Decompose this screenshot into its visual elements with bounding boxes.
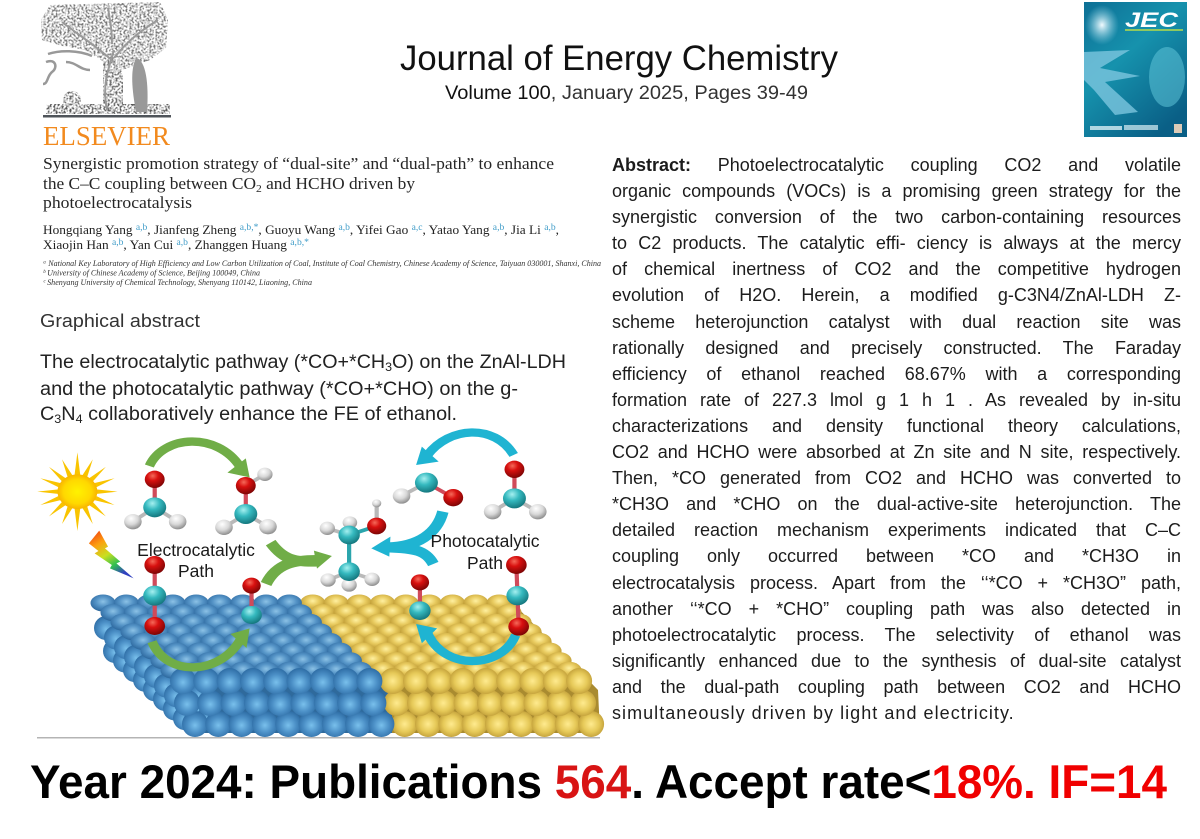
abstract text block: scheme heterojunction catalyst with dual reaction site was bbox=[612, 312, 1181, 332]
label: photocatalytic path: Path bbox=[467, 553, 503, 573]
icon: journal cover: JEC bbox=[1125, 9, 1179, 32]
authors: Xiaojin Han bbox=[43, 238, 104, 252]
paper title: 2 bbox=[256, 183, 262, 195]
authors: a,b,* bbox=[240, 222, 259, 232]
icon: Elsevier tree logo bbox=[41, 2, 171, 118]
paper title bbox=[43, 154, 554, 212]
arrows: green electrocatalytic path bbox=[149, 442, 332, 667]
authors: , Yan Cui bbox=[123, 238, 177, 252]
paper title: the C–C coupling between CO bbox=[43, 174, 246, 193]
abstract text block: evolution of H2O. Herein, a modified g-C3N4/ZnAl-LDH Z- bbox=[612, 285, 1181, 305]
graphical abstract description: N bbox=[61, 404, 76, 425]
logo: Elsevier wordmark: ELSEVIER bbox=[43, 121, 170, 151]
abstract text block: Then, *CO generated from CO2 and HCHO was converted to bbox=[612, 468, 1181, 488]
banner: journal statistics: Year 2024: Publications 564. Accept rate<18%. IF=14 bbox=[30, 755, 1167, 808]
catalyst slab: blue ZnAl-LDH and gold g-C3N4 spheres bbox=[90, 594, 604, 737]
abstract text block: of chemical inertness of CO2 and the competitive hydrogen bbox=[612, 259, 1181, 279]
authors: , Yifei Gao bbox=[350, 223, 412, 237]
authors: a,b,* bbox=[290, 237, 310, 247]
graphical abstract description: 3 bbox=[54, 412, 62, 426]
label: electrocatalytic path: Electrocatalytic bbox=[137, 540, 255, 560]
abstract text block: synergistic conversion of the two carbon-containing resources bbox=[612, 207, 1181, 227]
authors: , Zhanggen Huang bbox=[188, 238, 290, 252]
baseline bbox=[37, 737, 600, 738]
affiliations: ᵃ National Key Laboratory of High Efficiency and Low Carbon Utilization of Coal, Institute of Coal Chemistry, Chinese Academy of Science, Taiyuan 030001, Shanxi, China bbox=[43, 258, 601, 268]
abstract text block: and the dual-path coupling path between CO2 and HCHO bbox=[612, 677, 1181, 697]
heading: graphical abstract: Graphical abstract bbox=[40, 311, 200, 331]
authors: Hongqiang Yang bbox=[43, 223, 127, 237]
graphical abstract description: and the photocatalytic pathway (*CO+*CHO) on the g- bbox=[40, 379, 518, 400]
graphical abstract description: C bbox=[40, 404, 54, 425]
abstract text block: *CH3O and *CHO on the dual-active-site heterojunction. The bbox=[612, 494, 1181, 514]
affiliations: ᵇ University of Chinese Academy of Science, Beijing 100049, China bbox=[43, 268, 260, 278]
abstract text block: formation rate of 227.3 lmol g 1 h 1 . As revealed by in-situ bbox=[612, 390, 1181, 410]
affiliations: ᶜ Shenyang University of Chemical Technology, Shenyang 110142, Liaoning, China bbox=[43, 277, 312, 287]
abstract text block bbox=[612, 155, 1181, 723]
title: journal name: Journal of Energy Chemistry bbox=[400, 39, 838, 78]
abstract text block: organic compounds (VOCs) is a promising green strategy for the bbox=[612, 181, 1181, 201]
abstract text block: photoelectrocatalytic process. The selectivity of ethanol was bbox=[612, 625, 1181, 645]
graphical abstract description bbox=[40, 352, 566, 426]
authors: , Jianfeng Zheng bbox=[147, 223, 240, 237]
graphical abstract description: 3 bbox=[385, 360, 392, 374]
authors: a,c bbox=[412, 222, 423, 232]
authors: , Yatao Yang bbox=[423, 223, 493, 237]
abstract text block: simultaneously driven by light and electricity. bbox=[612, 703, 1015, 723]
authors: a,b bbox=[177, 237, 189, 247]
icon: lightning bolt bbox=[89, 531, 134, 578]
icon: sun bbox=[37, 452, 118, 531]
abstract text block: CO2 and HCHO were absorbed at Zn site and N site, respectively. bbox=[612, 442, 1181, 462]
abstract text block: coupling only occurred between *CO and *CH3O in bbox=[612, 546, 1181, 566]
abstract text block: rationally designed and precisely constructed. The Faraday bbox=[612, 338, 1181, 358]
authors: a,b bbox=[112, 237, 124, 247]
authors: a,b bbox=[493, 222, 505, 232]
graphical abstract description: collaboratively enhance the FE of ethanol. bbox=[83, 404, 457, 425]
arrows: cyan photocatalytic path bbox=[371, 432, 516, 661]
abstract text block: efficiency of ethanol reached 68.67% with a corresponding bbox=[612, 364, 1181, 384]
paper title: and HCHO driven by bbox=[262, 174, 416, 193]
authors bbox=[43, 222, 559, 252]
paper title: photoelectrocatalysis bbox=[43, 193, 192, 212]
icon: journal cover bbox=[1084, 2, 1187, 137]
authors: a,b bbox=[136, 222, 148, 232]
abstract text block: electrocatalysis process. Apart from the ‘‘*CO + *CH3O” path, bbox=[612, 572, 1181, 592]
molecules: formaldehyde, intermediates, ethanol and surface species bbox=[124, 461, 547, 636]
abstract text block: characterizations and density functional theory calculations, bbox=[612, 416, 1181, 436]
abstract text block: detailed reaction mechanism experiments indicated that C–C bbox=[612, 520, 1181, 540]
label: photocatalytic path bbox=[431, 531, 540, 573]
abstract text block: another ‘‘*CO + *CHO” coupling path was also detected in bbox=[612, 599, 1181, 619]
graphical abstract description: O) on the ZnAl-LDH bbox=[392, 352, 566, 373]
affiliations bbox=[43, 258, 601, 287]
paper title: Synergistic promotion strategy of “dual-site” and “dual-path” to enhance bbox=[43, 154, 554, 173]
authors: a,b bbox=[338, 222, 350, 232]
abstract text block: significantly enhanced due to the synthesis of dual-site catalyst bbox=[612, 651, 1181, 671]
chart: catalyst reaction mechanism illustration bbox=[37, 432, 604, 738]
abstract text block: Abstract: Photoelectrocatalytic coupling CO2 and volatile bbox=[612, 155, 1181, 175]
authors: , Guoyu Wang bbox=[258, 223, 338, 237]
authors: , Jia Li bbox=[504, 223, 544, 237]
graphical abstract description: 4 bbox=[76, 412, 83, 426]
label: electrocatalytic path: Path bbox=[178, 561, 214, 581]
abstract text block: to C2 products. The catalytic effi- ciency is always at the mercy bbox=[612, 233, 1181, 253]
authors: a,b bbox=[544, 222, 556, 232]
label: photocatalytic path: Photocatalytic bbox=[431, 531, 540, 551]
label: electrocatalytic path bbox=[137, 540, 255, 581]
authors: , bbox=[556, 223, 559, 237]
graphical abstract description: The electrocatalytic pathway (*CO+*CH bbox=[40, 352, 373, 373]
subtitle: volume and pages: Volume 100 , January 2025, Pages 39-49 bbox=[445, 83, 808, 104]
